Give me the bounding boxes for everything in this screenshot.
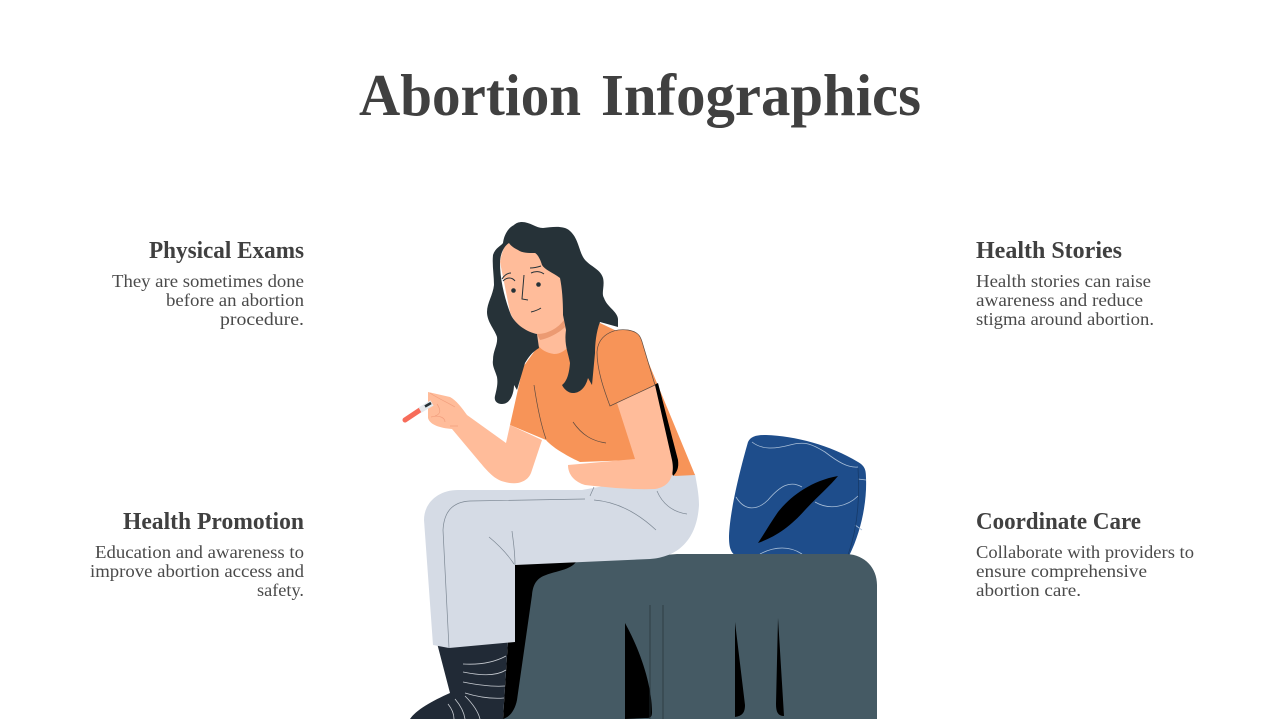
text block: Physical Exams: They are sometimes done bbox=[112, 271, 304, 291]
text block: Health Promotion: Education and awareness to bbox=[95, 542, 304, 562]
text block: Physical Exams: before an abortion bbox=[166, 290, 304, 310]
sofa bbox=[503, 554, 877, 719]
text block: Health Promotion: Health Promotion bbox=[123, 509, 304, 535]
title: Abortion bbox=[359, 62, 581, 128]
text block: Physical Exams: Physical Exams bbox=[149, 238, 304, 264]
text block: Coordinate Care: Coordinate Care bbox=[976, 509, 1141, 535]
left arm and hand bbox=[428, 392, 542, 483]
pillow bbox=[729, 435, 866, 556]
hair bbox=[487, 222, 618, 404]
text block: Health Stories bbox=[976, 238, 1154, 329]
text block: Health Stories: stigma around abortion. bbox=[976, 309, 1154, 329]
black shadow under leg bbox=[503, 560, 580, 719]
text block: Health Promotion: improve abortion access and bbox=[90, 561, 304, 581]
far arm shadow bbox=[654, 383, 678, 476]
text block: Coordinate Care bbox=[976, 509, 1194, 600]
orange shirt bbox=[510, 323, 695, 476]
text block: Physical Exams bbox=[112, 238, 304, 329]
title: Infographics bbox=[601, 62, 921, 128]
trousers bbox=[424, 474, 699, 648]
text block: Physical Exams: procedure. bbox=[220, 309, 304, 329]
text block: Coordinate Care: ensure comprehensive bbox=[976, 561, 1147, 581]
text block: Health Stories: Health stories can raise bbox=[976, 271, 1151, 291]
text block: Health Stories: awareness and reduce bbox=[976, 290, 1143, 310]
text block: Coordinate Care: Collaborate with providers to bbox=[976, 542, 1194, 562]
neck and face bbox=[500, 241, 570, 354]
pregnancy test bbox=[405, 403, 432, 420]
right arm bbox=[568, 385, 673, 489]
boot bbox=[410, 640, 508, 719]
text block: Health Promotion bbox=[90, 509, 304, 600]
sleeve bbox=[597, 330, 655, 406]
text block: Coordinate Care: abortion care. bbox=[976, 580, 1081, 600]
text block: Health Stories: Health Stories bbox=[976, 238, 1122, 264]
text block: Health Promotion: safety. bbox=[257, 580, 304, 600]
illustration: worried woman sitting with test bbox=[405, 222, 877, 719]
